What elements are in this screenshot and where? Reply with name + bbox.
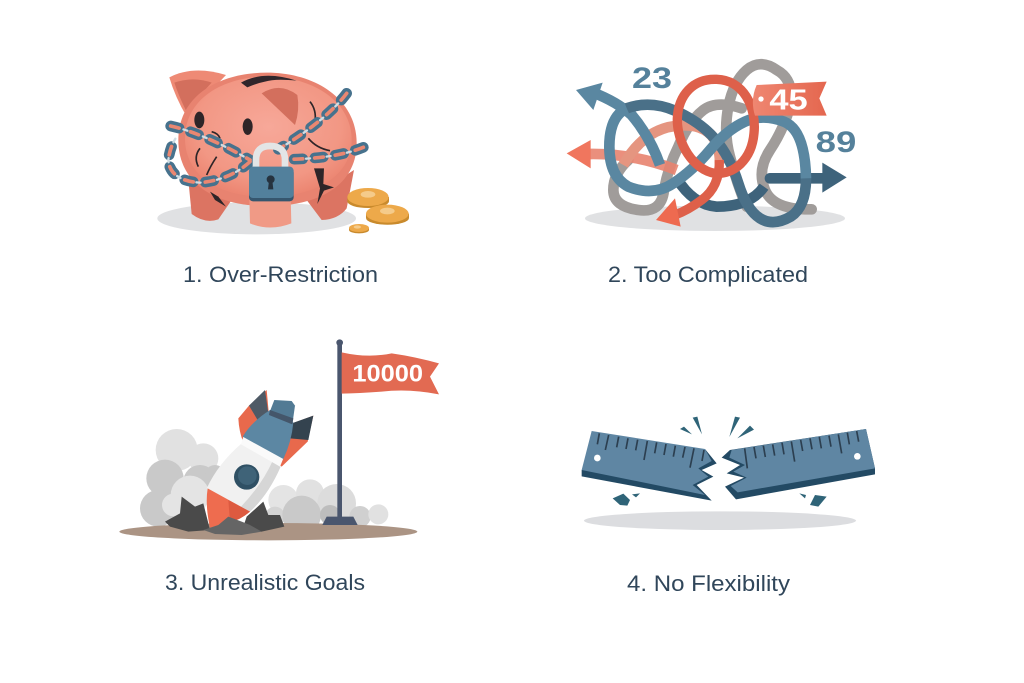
crack sparks bbox=[680, 417, 754, 438]
icon: arrowhead right bbox=[822, 163, 847, 193]
icon: rocket bbox=[207, 390, 313, 528]
panel: crashed rocket illustration bbox=[119, 339, 439, 540]
dark blue arrow bbox=[627, 105, 827, 222]
salmon arrow bbox=[567, 125, 720, 170]
smoke clouds bbox=[140, 429, 388, 534]
red down arrow bbox=[656, 160, 719, 227]
flag: 10000 bbox=[342, 352, 439, 394]
flag: 10000: 10000 bbox=[352, 361, 423, 388]
panel: tangled arrows illustration bbox=[567, 62, 856, 231]
red ring bbox=[677, 79, 754, 173]
icon: piggy bank bbox=[169, 71, 357, 227]
flag: 45: 45 bbox=[769, 84, 808, 116]
splats behind rocket bbox=[165, 497, 284, 532]
number: 23: 23 bbox=[632, 62, 672, 95]
ground bbox=[119, 523, 417, 540]
ground shadow bbox=[584, 511, 856, 530]
ruler fragments bbox=[613, 493, 827, 507]
debris mound bbox=[203, 517, 262, 535]
flag pole bbox=[322, 339, 358, 525]
flag: 45 bbox=[753, 82, 827, 116]
heading: No Flexibility: 4. No Flexibility bbox=[627, 571, 790, 596]
panel: broken ruler illustration bbox=[582, 417, 875, 530]
ground shadow bbox=[157, 202, 356, 234]
ground shadow bbox=[585, 206, 845, 231]
panel: piggy bank illustration bbox=[157, 71, 409, 234]
heading: Over-Restriction: 1. Over-Restriction bbox=[183, 262, 378, 287]
left ruler piece bbox=[582, 431, 717, 501]
grey tangled lines bbox=[613, 64, 812, 210]
blue sine line bbox=[609, 108, 806, 191]
blue upper arrow bbox=[576, 83, 660, 165]
icon: padlock bbox=[249, 146, 294, 201]
icon: coins bbox=[347, 188, 409, 233]
number: 89: 89 bbox=[816, 126, 856, 159]
heading: Unrealistic Goals: 3. Unrealistic Goals bbox=[165, 570, 365, 595]
heading: Too Complicated: 2. Too Complicated bbox=[608, 262, 808, 287]
right ruler piece bbox=[722, 429, 875, 499]
chains bbox=[168, 93, 363, 183]
